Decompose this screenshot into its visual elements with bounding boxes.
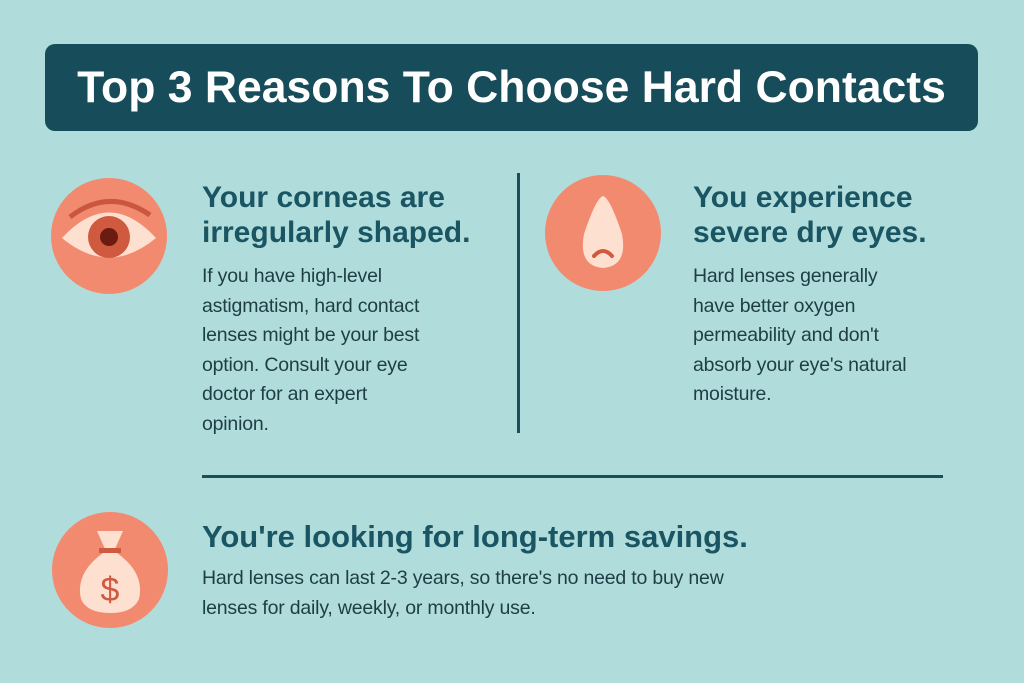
panel: corneas: Your corneas are <box>202 181 445 214</box>
panel: savings: You're looking for long-term savings. <box>202 519 748 554</box>
divider vertical <box>517 173 520 433</box>
divider horizontal <box>202 475 943 478</box>
panel: corneas: If you have high-level <box>202 265 382 287</box>
panel: savings: lenses for daily, weekly, or monthly use. <box>202 597 536 619</box>
title bar: Top 3 Reasons To Choose Hard Contacts <box>77 63 946 112</box>
panel: savings: Hard lenses can last 2-3 years, so there's no need to buy new <box>202 567 724 589</box>
panel: dry eyes: Hard lenses generally <box>693 265 877 287</box>
panel: dry eyes: severe dry eyes. <box>693 216 927 249</box>
icon: drop <box>545 175 661 291</box>
panel: corneas: astigmatism, hard contact <box>202 295 419 317</box>
panel: dry eyes <box>693 181 927 405</box>
panel: corneas: doctor for an expert <box>202 383 367 405</box>
panel: dry eyes: have better oxygen <box>693 295 855 317</box>
panel: corneas: lenses might be your best <box>202 324 419 346</box>
panel: corneas: option. Consult your eye <box>202 354 408 376</box>
icon: eye <box>51 178 167 294</box>
icon: money bag <box>52 512 168 628</box>
panel: dry eyes: moisture. <box>693 383 771 405</box>
icon: money bag: $ <box>101 571 120 609</box>
panel: savings <box>202 519 748 619</box>
panel: corneas: opinion. <box>202 413 269 435</box>
panel: corneas: irregularly shaped. <box>202 216 470 249</box>
panel: dry eyes: You experience <box>693 181 913 214</box>
panel: dry eyes: absorb your eye's natural <box>693 354 906 376</box>
panel: corneas <box>202 181 470 435</box>
title bar <box>45 44 978 131</box>
panel: dry eyes: permeability and don't <box>693 324 879 346</box>
